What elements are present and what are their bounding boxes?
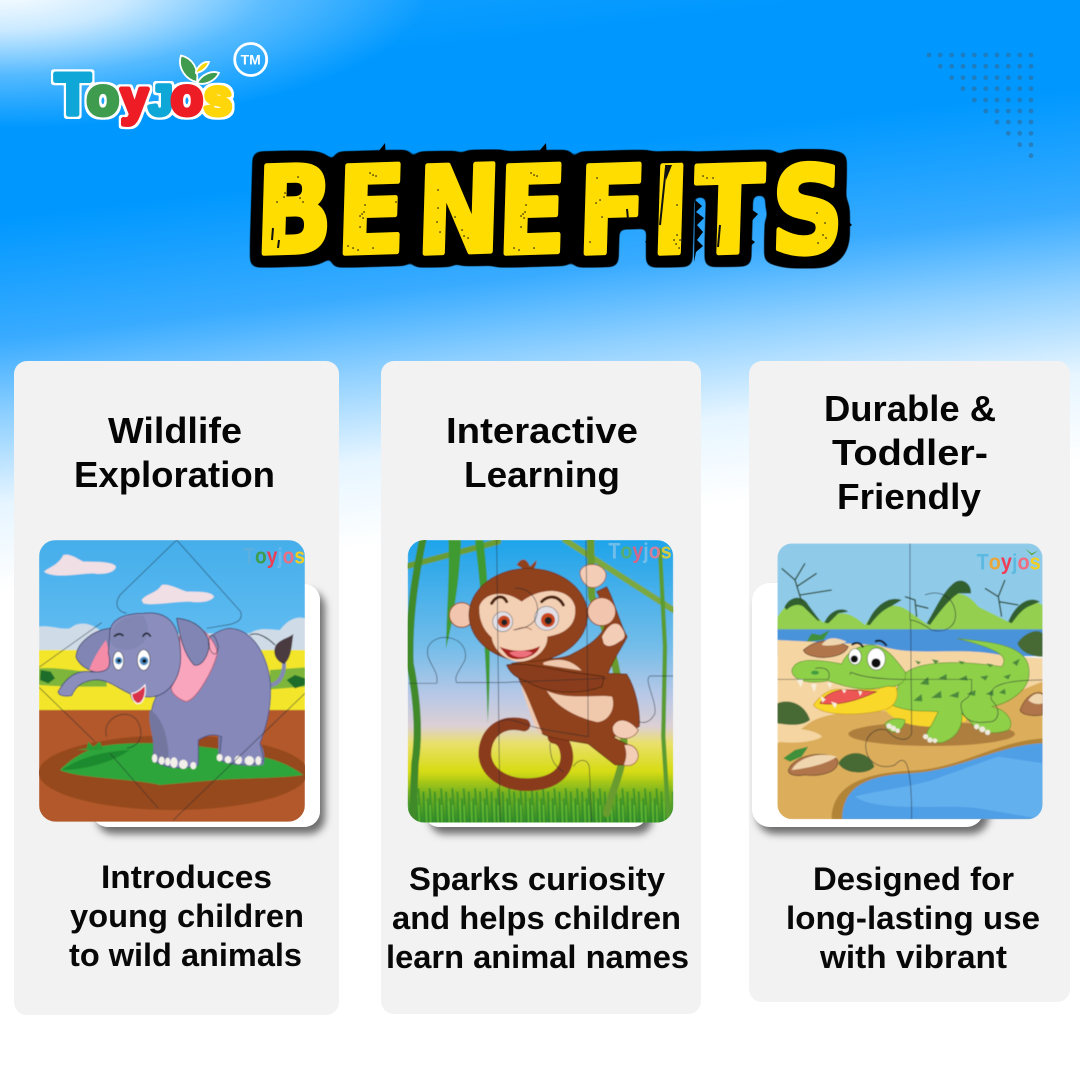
card heading: [446, 410, 638, 495]
card background: [749, 361, 1070, 1002]
icon: leaves: [180, 56, 219, 84]
trademark badge: TM: [241, 52, 261, 68]
card description: young children: [70, 898, 304, 934]
card description: Designed for: [813, 861, 1014, 897]
card heading: [824, 388, 996, 517]
card description: [786, 861, 1040, 975]
panel: interactive learning: [381, 361, 701, 1014]
card heading: Friendly: [837, 476, 981, 517]
card description: learn animal names: [386, 939, 689, 975]
puzzle image: monkey: [408, 538, 673, 823]
top-left light glow: [0, 0, 450, 135]
card description: Sparks curiosity: [409, 861, 665, 897]
white photo backing: [92, 584, 320, 827]
card heading: Toddler-: [832, 432, 988, 473]
title: Benefits: [251, 141, 852, 283]
white photo backing: [425, 640, 647, 827]
panel: wildlife exploration: [14, 361, 339, 1015]
card heading: [74, 410, 275, 495]
card description: Introduces: [101, 859, 272, 895]
card heading: Interactive: [446, 410, 638, 451]
card description: [386, 861, 689, 975]
photo watermark: Toyjos: [243, 543, 305, 568]
monkey body: [512, 587, 640, 765]
title grunge speckles: [277, 173, 826, 250]
card background: [14, 361, 339, 1015]
card heading: Exploration: [74, 454, 275, 495]
card heading: Wildlife: [108, 410, 242, 451]
logo: Toyjos: [55, 56, 232, 128]
puzzle image: elephant: [38, 540, 308, 823]
card heading: Durable &: [824, 388, 996, 429]
card description: long-lasting use: [786, 900, 1040, 936]
trademark badge: [235, 44, 267, 76]
card heading: Learning: [464, 454, 620, 495]
panel: durable and toddler-friendly: [749, 361, 1070, 1002]
card background: [381, 361, 701, 1014]
white photo backing: [752, 583, 984, 827]
puzzle image: crocodile: [777, 543, 1043, 819]
title spikes: [304, 143, 852, 262]
wordmark: ToyJos: [55, 62, 232, 128]
photo watermark: Toyjos: [608, 538, 672, 563]
decorative dot grid: [929, 55, 1031, 156]
card description: to wild animals: [69, 937, 302, 973]
card description: [69, 859, 304, 973]
card description: and helps children: [392, 900, 681, 936]
title text: BENEFITS: [251, 141, 849, 283]
card description: with vibrant: [819, 939, 1007, 975]
photo watermark: Toyjos: [977, 549, 1041, 574]
